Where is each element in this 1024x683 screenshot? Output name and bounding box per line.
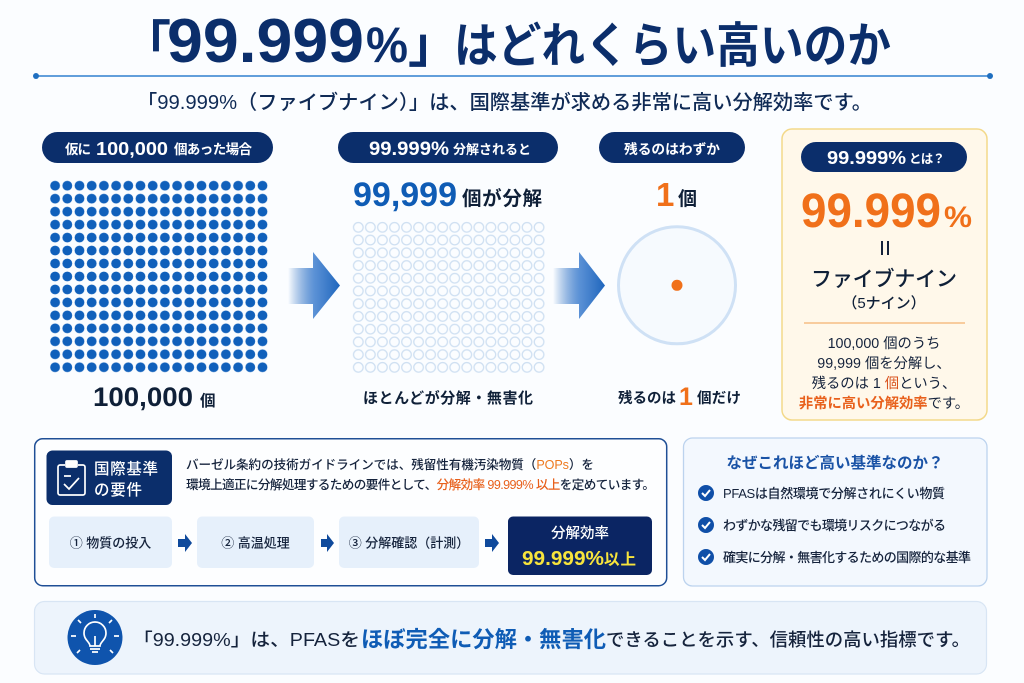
panel: what is 99.999% <box>782 129 987 420</box>
pill heading: remaining: 残るのはわずか <box>624 141 720 157</box>
description: 非常に高い分解効率です。 <box>799 394 969 412</box>
panel: 99,999 <box>338 132 558 407</box>
remaining count <box>656 176 697 213</box>
description <box>799 335 969 412</box>
remaining count: 個 <box>678 188 697 210</box>
heading: なぜこれほど高い基準なのか？ <box>726 453 944 472</box>
caption: ほとんどが分解・無害化 <box>363 389 533 407</box>
panel: international standard <box>35 439 667 586</box>
pill heading: initial count: 個あった場合 <box>174 141 252 157</box>
pill heading <box>801 142 967 172</box>
pill heading: remaining <box>599 132 745 163</box>
step 2: ② 高温処理 <box>221 536 290 550</box>
arrow 1 <box>288 252 340 319</box>
caption <box>618 383 741 411</box>
large value: 99.999 <box>801 185 941 238</box>
conclusion text <box>133 627 970 652</box>
title: 」 <box>408 17 458 73</box>
title: 99.999 <box>167 7 364 76</box>
panel: remaining <box>599 132 745 411</box>
title <box>121 7 891 76</box>
description: 環境上適正に分解処理するための要件として、分解効率 99.999% 以上を定めています。 <box>186 477 655 492</box>
title rule <box>33 73 993 79</box>
decomposed count <box>353 176 542 214</box>
reason 1: PFASは自然環境で分解されにくい物質 <box>723 486 945 501</box>
step 3: ③ 分解確認（計測） <box>349 536 469 550</box>
conclusion text: 「99.999%」は、PFASを <box>133 630 360 650</box>
pill heading: 99.999% <box>827 148 906 168</box>
ring grid: decomposed <box>352 221 545 374</box>
reason 3: 確実に分解・無害化するための国際的な基準 <box>723 550 971 565</box>
description: 99,999 個を分解し、 <box>817 355 951 372</box>
pill heading: decomposed <box>338 132 558 163</box>
heading badge <box>46 450 172 505</box>
description <box>186 457 655 492</box>
panel: 100,000 <box>42 132 273 412</box>
name note: （5ナイン） <box>842 295 926 312</box>
title: % <box>366 17 408 73</box>
heading badge: の要件 <box>94 481 142 499</box>
dot grid: full <box>49 179 269 374</box>
reason 2: わずかな残留でも環境リスクにつながる <box>723 518 946 533</box>
panel: why so high <box>684 438 987 586</box>
caption: 個だけ <box>697 390 741 407</box>
arrow 2 <box>553 252 605 319</box>
step 3 <box>339 516 479 568</box>
icon: clipboard <box>58 461 85 495</box>
heading badge: 国際基準 <box>94 460 158 478</box>
conclusion text: ほぼ完全に分解・無害化 <box>361 627 606 652</box>
arrow <box>321 534 334 552</box>
description: 100,000 個のうち <box>828 335 940 352</box>
title: 「 <box>121 17 171 73</box>
pill heading: initial count <box>42 132 273 163</box>
name: ファイブナイン <box>811 267 957 291</box>
pill heading: とは？ <box>909 152 945 166</box>
pill heading: initial count: 仮に <box>65 142 91 157</box>
step 1 <box>49 516 172 568</box>
result: 以上 <box>604 550 636 568</box>
pill heading: decomposed: 99.999% <box>369 139 449 160</box>
result <box>508 516 652 575</box>
pill heading: initial count: 100,000 <box>96 139 168 159</box>
caption: 1 <box>679 383 693 411</box>
panel: conclusion <box>34 602 986 674</box>
remaining circle <box>618 227 736 344</box>
divider <box>804 322 965 324</box>
caption: 残るのは <box>618 389 676 407</box>
subtitle: 「99.999%（ファイブナイン）」は、国際基準が求める非常に高い分解効率です。 <box>137 90 872 114</box>
count label: 個 <box>200 392 216 410</box>
step 1: ① 物質の投入 <box>70 536 151 550</box>
large value: % <box>944 201 972 234</box>
remaining count: 1 <box>656 176 674 213</box>
title: はどれくらい高いのか <box>454 20 891 73</box>
pill heading: decomposed: 分解されると <box>453 142 531 157</box>
decomposed count: 個が分解 <box>462 187 542 210</box>
count label: 100,000 <box>93 382 193 412</box>
result: 99.999% <box>522 547 604 570</box>
arrow <box>485 534 499 552</box>
conclusion text: できることを示す、信頼性の高い指標です。 <box>606 630 970 650</box>
description: バーゼル条約の技術ガイドラインでは、残留性有機汚染物質（POPs）を <box>186 457 594 472</box>
decomposed count: 99,999 <box>353 176 457 214</box>
equals sign <box>881 241 889 255</box>
description: 残るのは 1 個という、 <box>812 375 956 392</box>
arrow <box>178 534 192 552</box>
icon: light bulb <box>68 610 122 665</box>
step 2 <box>197 516 314 568</box>
result: 分解効率 <box>551 525 609 542</box>
